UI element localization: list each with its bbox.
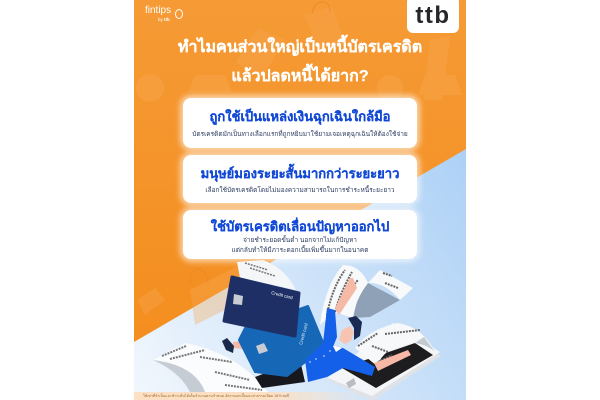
text: postponing the problem	[232, 235, 368, 254]
title: ทำไมคนส่วนใหญ่เป็นหนี้บัตรเครดิต	[178, 39, 422, 56]
text: postponing the problem: จ่ายชำระยอดขั้นต่ำ นอกจากไม่แก้ปัญหา	[243, 237, 357, 244]
logo: fintips by ttb: fintips	[145, 5, 171, 16]
credit card: blue: Credit card	[298, 322, 309, 345]
footer note: ใช้เท่าที่จำเป็นและชำระคืนได้เต็มจำนวนตามกำหนด อัตราดอกเบี้ยและค่าธรรมเนียม 16% ต่อปี	[143, 394, 289, 398]
logo: ttb: ttb	[415, 2, 451, 29]
title: แล้วปลดหนี้ได้ยาก?	[231, 68, 369, 85]
heading: postponing the problem: ใช้บัตรเครดิตเลื่อนปัญหาออกไป	[211, 219, 389, 234]
panel: postponing the problem	[183, 210, 417, 259]
person	[305, 278, 411, 382]
credit card: navy: Credit card	[271, 290, 294, 300]
credit card: blue	[239, 306, 325, 376]
footer note	[134, 392, 466, 400]
heading: emergency money: ถูกใช้เป็นแหล่งเงินฉุกเฉินใกล้มือ	[210, 109, 390, 124]
panel: emergency money	[183, 98, 417, 148]
legs and shoe	[222, 338, 305, 388]
receipt: upper right	[320, 265, 413, 325]
receipt: emerging from phone	[355, 323, 435, 366]
panel: short-term thinking	[183, 155, 417, 203]
receipt: bottom left	[153, 343, 268, 392]
credit card: navy	[224, 277, 299, 336]
logo: ttb	[407, 0, 459, 33]
logo: fintips by ttb: by ttb	[158, 17, 170, 22]
text: postponing the problem: แต่กลับทำให้มีภาระดอกเบี้ยเพิ่มขึ้นมากในอนาคต	[232, 247, 368, 254]
receipt: top behind cards	[237, 260, 296, 290]
title	[178, 34, 422, 85]
logo: fintips by ttb	[145, 5, 183, 22]
text: emergency money: บัตรเครดิตมักเป็นทางเลือกแรกที่ถูกหยิบมาใช้ยามเจอเหตุฉุกเฉินให้ต้องใช้จ่าย	[192, 131, 408, 138]
heading: short-term thinking: มนุษย์มองระยะสั้นมากกว่าระยะยาว	[201, 166, 399, 181]
text: short-term thinking: เลือกใช้บัตรเครดิตโดยไม่มองความสามารถในการชำระหนี้ระยะยาว	[205, 187, 395, 194]
phone	[328, 323, 441, 400]
